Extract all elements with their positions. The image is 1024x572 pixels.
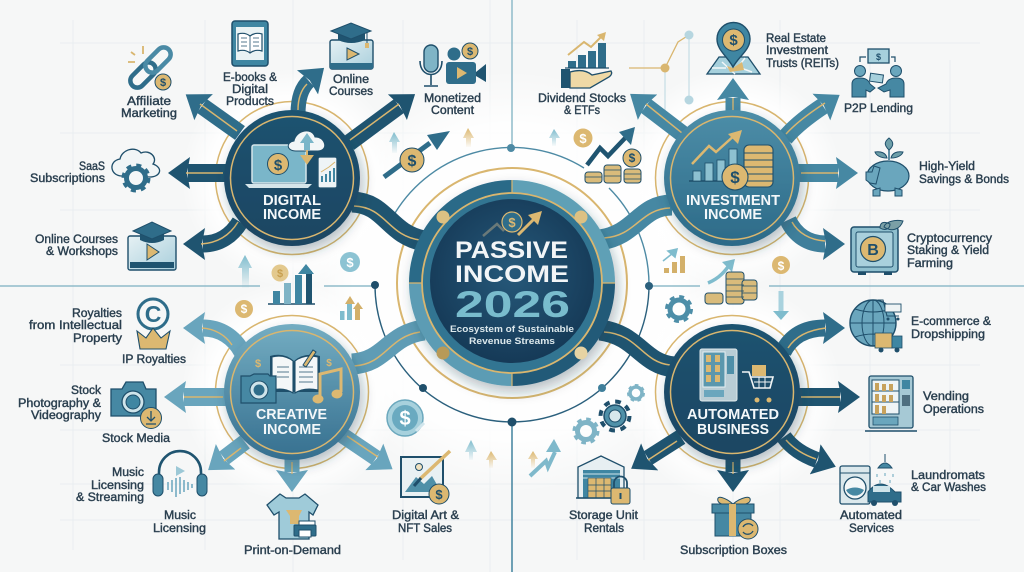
panel: investment income hub (664, 110, 800, 246)
subtitle: Revenue Streams (469, 336, 555, 347)
hub title: CREATIVE (256, 407, 327, 423)
node: Royalties and IP (29, 299, 242, 366)
label: Stock Media (102, 433, 171, 445)
label: Online Courses (35, 234, 118, 246)
node: Laundromats and Automated Services (784, 437, 986, 535)
label: Stock (71, 385, 101, 397)
arrow (798, 164, 838, 182)
decorative icons: left mid: $ (241, 302, 248, 316)
label: Affiliate (127, 96, 171, 108)
title: 2026 (455, 284, 570, 325)
node: Monetized Content (349, 43, 486, 143)
title: PASSIVE (455, 237, 568, 264)
arrow (726, 458, 740, 474)
label: Online (333, 74, 369, 86)
icon: dividend hand and bars (561, 32, 612, 88)
arrow (186, 164, 226, 182)
node: E-books and Digital Products (223, 21, 309, 114)
icon: chain link: $ (160, 77, 166, 89)
icon: storage unit with padlock (576, 456, 630, 504)
label: Licensing (153, 523, 206, 535)
panel: automated business hub (664, 324, 800, 460)
arrow (201, 222, 240, 244)
label: Courses (329, 86, 373, 98)
label: Subscription Boxes (680, 545, 787, 557)
label: & Workshops (46, 246, 118, 258)
icon: graduation cap and video (330, 23, 373, 69)
connector: investment to center (600, 205, 672, 240)
node: E-commerce and Dropshipping (783, 300, 991, 352)
icon: video workshop (128, 222, 176, 270)
label (392, 510, 459, 535)
icon: safe with bitcoin: B (867, 242, 879, 259)
icon: piggy bank with plant (866, 138, 909, 196)
connector: digital to center (352, 202, 424, 241)
label (30, 161, 105, 185)
label: from Intellectual (29, 320, 122, 332)
label: Rentals (584, 523, 624, 535)
hub title: INCOME (263, 207, 321, 223)
decorative icons: right mid: $ (778, 259, 785, 273)
node: Real Estate Investment Trusts (707, 23, 839, 114)
icon: peer-to-peer people: $ (876, 52, 881, 62)
label: Digital Art & (392, 510, 459, 522)
node: Music Licensing (76, 442, 245, 535)
hub title (263, 193, 321, 223)
label: Print-on-Demand (244, 545, 341, 557)
label: SaaS (79, 161, 105, 173)
icon: t-shirt with printer (267, 494, 318, 539)
icon: laptop, cloud and phone: $ (274, 157, 283, 174)
arrow (798, 388, 840, 406)
label (538, 93, 626, 117)
label: Marketing (121, 108, 177, 120)
label: Products (226, 96, 274, 108)
label (29, 308, 186, 366)
subtitle (450, 324, 574, 347)
hub title: INCOME (263, 422, 321, 438)
label: Real Estate (766, 33, 826, 45)
arrow (726, 98, 740, 114)
label (223, 72, 277, 108)
decorative icons: right mid (528, 127, 790, 476)
label (569, 510, 639, 535)
subtitle: Ecosystem of Sustainable (450, 324, 574, 335)
label (919, 161, 1009, 186)
label: Digital (232, 84, 268, 96)
label: & Streaming (76, 492, 144, 504)
hub title (256, 407, 327, 438)
label (18, 385, 171, 445)
icon: headphones (153, 451, 207, 497)
label (911, 316, 991, 341)
arrow (648, 437, 681, 460)
node: Dividend Stocks and ETFs (538, 32, 684, 135)
label: E-commerce & (911, 316, 991, 328)
arrow (349, 104, 399, 143)
arrow (184, 388, 226, 406)
hub title: DIGITAL (263, 193, 321, 209)
label: Cryptocurrency (907, 233, 992, 245)
decorative icons: left mid (235, 128, 497, 468)
label: Monetized (424, 93, 481, 105)
label: Royalties (72, 308, 122, 320)
label: E-books & (223, 72, 277, 84)
icon: camera with download (111, 382, 162, 428)
icon: coin and rising arrow (483, 211, 542, 236)
label: Subscriptions (30, 173, 105, 185)
icon: vending machine (865, 376, 917, 431)
icon: microphone and camera: $ (467, 46, 473, 58)
label: Storage Unit (569, 510, 639, 522)
node: Online Courses and Workshops (35, 222, 240, 270)
connector: automated to center (600, 330, 674, 367)
arrow (298, 81, 309, 114)
label: Operations (923, 404, 984, 416)
node: Storage Unit Rentals (569, 437, 681, 535)
hub title: AUTOMATED (687, 407, 779, 423)
node: Vending Operations (798, 376, 984, 431)
label (907, 233, 992, 270)
arrow (788, 220, 825, 244)
label: IP Royalties (122, 354, 186, 366)
label: Automated (840, 510, 902, 522)
arrow (202, 328, 242, 352)
label: Farming (907, 258, 953, 270)
decorative icons: left mid: $ (399, 408, 411, 430)
icon: vending machine and cart (700, 349, 773, 402)
icon: map pin: $ (729, 32, 738, 49)
icon: globe, cart and truck (850, 300, 902, 352)
label: High-Yield (919, 161, 975, 173)
icon: copyright crown: C (145, 301, 161, 327)
node: High-Yield Savings and Bonds (798, 138, 1009, 196)
label: Content (431, 105, 475, 117)
node: P2P Lending (785, 49, 913, 138)
label: Dividend Stocks (538, 93, 626, 105)
arrow (284, 458, 300, 474)
arrow (646, 104, 684, 135)
label: Dropshipping (911, 329, 985, 341)
icon: book, camera and music note (241, 350, 342, 404)
gold halo rings behind arrows (216, 102, 808, 468)
arrow (342, 435, 378, 458)
decorative icons: right mid: $ (629, 151, 636, 165)
icon: copyright crown (137, 299, 170, 349)
label: Staking & Yield (907, 245, 989, 257)
label (424, 93, 481, 117)
decorative icons: left mid: $ (277, 268, 283, 280)
node: Subscription Boxes (680, 458, 787, 557)
icon: book, camera and music note: $ (326, 358, 332, 369)
label: Vending (923, 391, 969, 403)
label (76, 467, 206, 535)
arrow (785, 103, 825, 138)
hub title: INCOME (704, 207, 762, 223)
panel: creative income hub (224, 324, 360, 460)
node: Cryptocurrency Staking (788, 220, 992, 275)
node: Print-on-Demand (244, 458, 341, 557)
icon: cloud gear (112, 149, 160, 190)
arrow (224, 442, 245, 461)
hub title: BUSINESS (697, 422, 769, 438)
label: & Car Washes (911, 482, 986, 494)
label: Photography & (18, 398, 101, 410)
hub title (687, 407, 779, 438)
panel: digital income hub (224, 110, 360, 246)
title: INCOME (455, 261, 569, 288)
label (121, 96, 177, 120)
icon: washer and car (840, 454, 901, 506)
hub title: INVESTMENT (686, 193, 780, 209)
hub title (686, 193, 780, 223)
connector: creative to center (352, 330, 424, 366)
label: NFT Sales (398, 523, 452, 535)
node: Affiliate Marketing (121, 44, 240, 133)
label: Licensing (91, 480, 144, 492)
arrow (783, 328, 826, 352)
panel: central hub (409, 180, 615, 386)
arrow (200, 104, 240, 133)
arrow (784, 437, 817, 460)
decorative icons: left mid: $ (408, 153, 417, 170)
icon: coin and rising arrow: $ (508, 215, 516, 230)
label: Music (164, 510, 196, 522)
label: P2P Lending (844, 103, 913, 115)
label (766, 33, 839, 70)
icon: safe with bitcoin (851, 220, 903, 275)
icon: growth chart and coins: $ (730, 168, 740, 187)
icon: gift box (712, 497, 758, 539)
label: Laundromats (911, 470, 985, 482)
label: Property (73, 333, 122, 345)
label: Music (112, 467, 144, 479)
label (35, 234, 118, 258)
label (923, 391, 984, 416)
label: Trusts (REITs) (766, 58, 839, 70)
label: Videography (31, 410, 101, 422)
node: SaaS Subscriptions (30, 149, 226, 190)
label (840, 470, 986, 535)
title (455, 237, 570, 325)
node: Online Courses (329, 23, 373, 98)
node: Stock Photography and Stock Media (18, 382, 226, 445)
label: & ETFs (564, 105, 600, 117)
node: Digital Art and NFT Sales (342, 435, 459, 535)
icon: digital art: $ (435, 487, 443, 502)
label: Investment (766, 45, 829, 57)
decorative icons: right mid: $ (579, 131, 587, 146)
label: Services (849, 523, 894, 535)
decorative icons: left mid: $ (346, 255, 354, 270)
icon: e-book tablet (232, 21, 268, 66)
label: Savings & Bonds (919, 174, 1009, 186)
label (329, 74, 373, 98)
icon: book, camera and music note: $ (255, 358, 261, 370)
